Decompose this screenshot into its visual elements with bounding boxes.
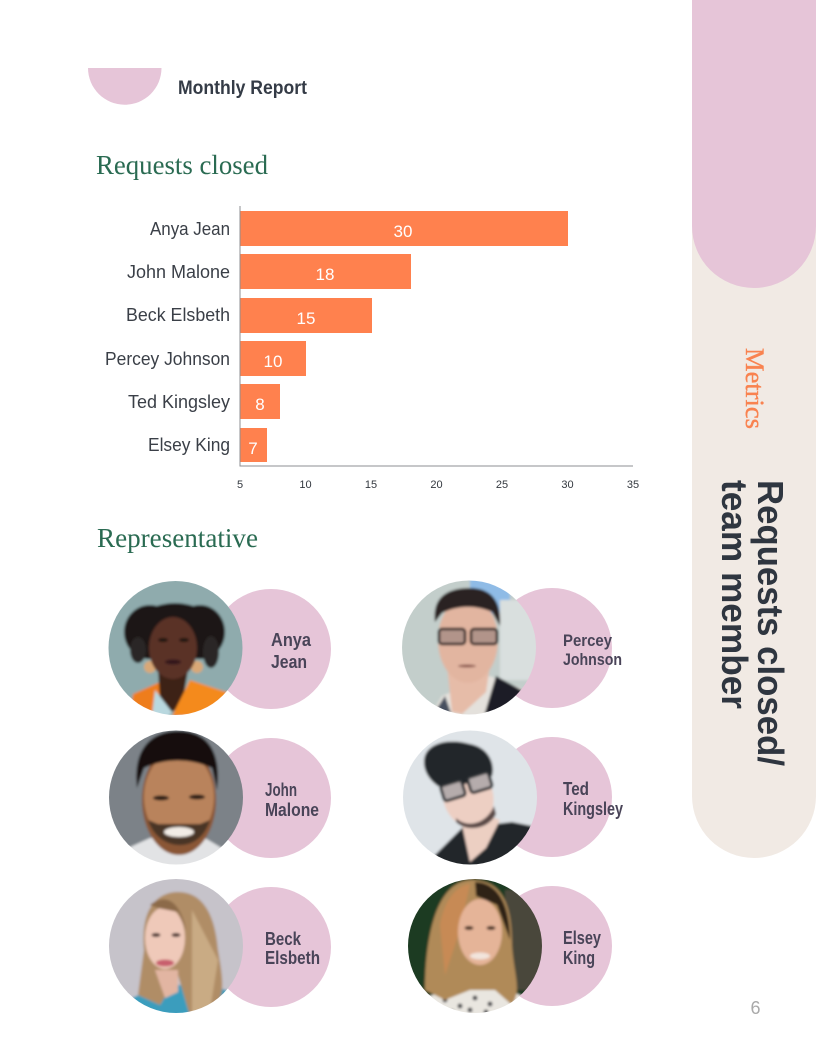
beige sidebar pill [692,0,816,858]
name circle [492,886,612,1006]
category labels: Elsey King [148,435,230,455]
category labels [105,219,230,455]
heading: Requests closed: Requests closed [96,150,268,180]
name: Percey [563,631,612,650]
axis tick labels: 35 [627,479,639,491]
name: John [265,780,297,800]
name circle [211,589,331,709]
axis tick labels: 5 [237,479,243,491]
category labels: Anya Jean [150,219,230,239]
name circle [211,738,331,858]
page number: 6 [750,998,761,1018]
bars [240,211,568,462]
sidebar title: Requests closed/ [750,480,791,766]
value labels: 10 [264,352,282,371]
value labels: 15 [297,309,315,328]
name [563,928,601,968]
name: Elsey [563,928,601,948]
axis tick labels: 15 [365,479,377,491]
name: Malone [265,800,319,820]
value labels [248,222,412,458]
portrait: Ted Kingsley [400,728,542,868]
value labels: 8 [255,395,265,414]
portrait: Elsey King [408,879,542,1013]
value labels: 7 [248,439,258,458]
sidebar title: team member [714,480,755,709]
category labels: Percey Johnson [105,349,230,369]
header semicircle icon [88,68,162,105]
axis tick labels: 10 [299,479,312,491]
name: King [563,948,595,968]
axis tick labels [237,479,639,491]
name circle [492,588,612,708]
name [265,929,320,968]
card: Beck Elsbeth [105,876,331,1020]
portrait: Beck Elsbeth [109,879,243,1013]
axis tick labels: 20 [430,479,443,491]
panel: right sidebar [692,0,816,858]
name: Jean [271,652,307,672]
card: Percey Johnson [400,578,622,718]
name: Ted [563,779,589,799]
value labels: 18 [316,265,334,284]
portrait: Anya Jean [105,578,245,718]
name [271,630,312,672]
name [563,631,622,669]
card: Anya Jean [105,578,331,718]
sidebar title [714,480,791,766]
sidebar label: Metrics: Metrics [740,348,769,429]
portrait: Percey Johnson [400,578,540,718]
name [563,779,623,819]
card: Ted Kingsley [400,728,623,868]
name: Elsbeth [265,948,320,968]
name [265,780,319,820]
name: Beck [265,929,302,949]
card: Elsey King [405,876,612,1020]
card: John Malone [105,728,331,868]
bar chart: requests closed [105,206,639,491]
name circle [211,887,331,1007]
axis tick labels: 30 [561,479,574,491]
name: Johnson [563,650,622,669]
axes [240,206,633,466]
category labels: Beck Elsbeth [126,305,230,325]
pink sidebar pill [692,0,816,288]
name circle [492,737,612,857]
name: Kingsley [563,799,623,819]
heading: Representative: Representative [97,523,258,553]
category labels: John Malone [127,262,230,282]
portrait: John Malone [105,728,247,868]
category labels: Ted Kingsley [128,392,230,412]
axis tick labels: 25 [496,479,508,491]
heading: Monthly Report: Monthly Report [178,78,308,99]
value labels: 30 [394,222,412,241]
name: Anya [271,630,312,650]
